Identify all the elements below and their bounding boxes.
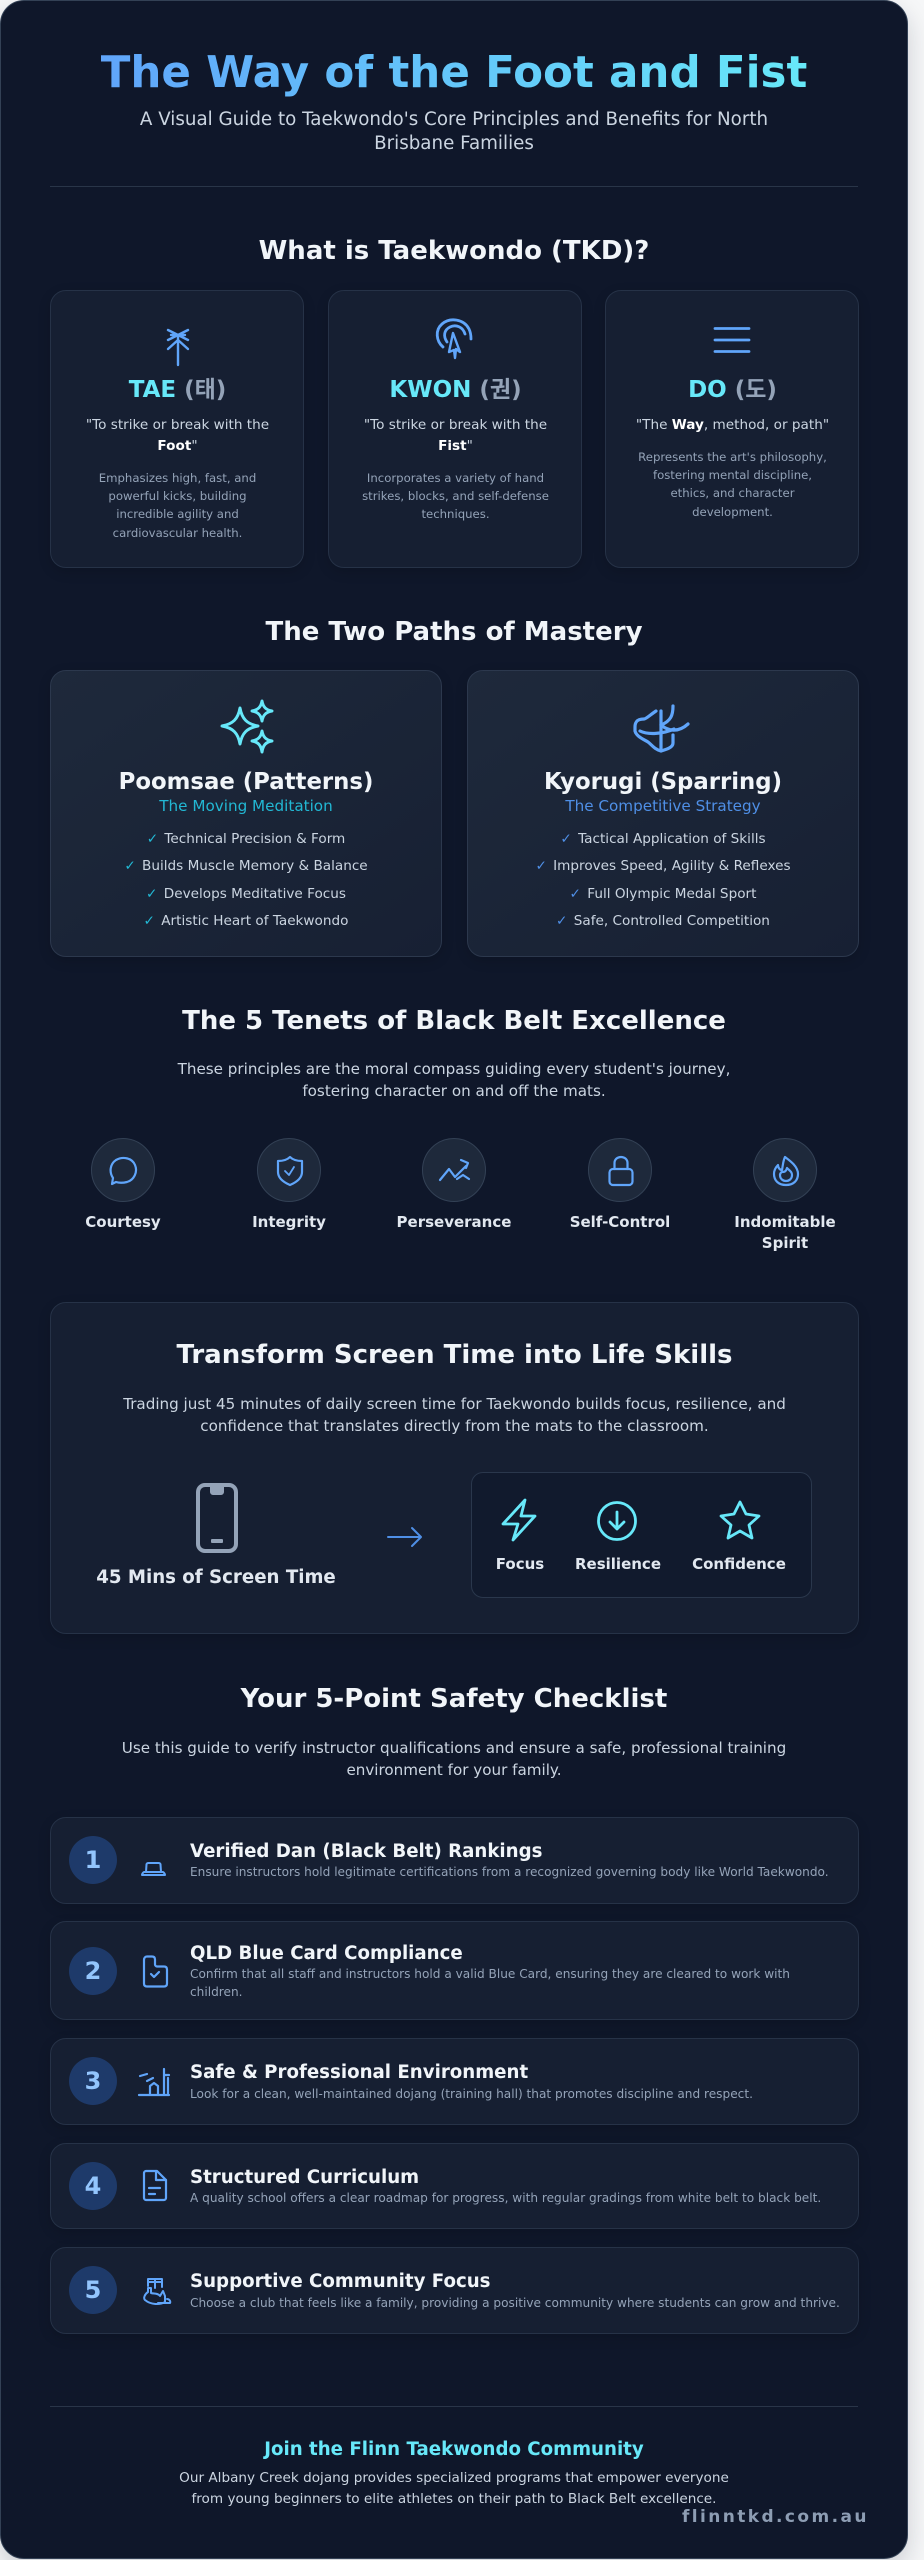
- subtitle: [140, 109, 768, 154]
- description: [190, 1967, 790, 1999]
- checklist: ✓ Tactical Application of Skills: [560, 831, 766, 847]
- quote: Fist": [438, 438, 473, 454]
- heading: tenets: The 5 Tenets of Black Belt Excellence: [182, 1006, 726, 1036]
- icon: sparkles: [220, 700, 274, 754]
- label: Resilience: [575, 1555, 661, 1573]
- card title: Kyorugi (Sparring): [544, 769, 782, 795]
- icon: foot: [166, 328, 190, 366]
- panel: Kyorugi: [467, 670, 859, 957]
- number badge: 3: [85, 2067, 101, 2095]
- card subtitle: The Moving Meditation: [159, 797, 333, 815]
- card title: KWON (권): [389, 377, 522, 403]
- tenet: perseverance: [397, 1138, 511, 1231]
- description: ethics, and character: [670, 486, 795, 500]
- number badge: 5: [85, 2276, 101, 2304]
- description: development.: [692, 505, 773, 519]
- title: Structured Curriculum: [190, 2167, 419, 2188]
- quote: [86, 417, 269, 454]
- watermark: flinntkd.com.au: [682, 2507, 869, 2527]
- footer text: Our Albany Creek dojang provides specialized programs that empower everyone: [179, 2470, 729, 2486]
- icon: flame: [753, 1138, 817, 1202]
- description: powerful kicks, building: [108, 489, 247, 503]
- title: Supportive Community Focus: [190, 2271, 490, 2292]
- heading: safety checklist: Your 5-Point Safety Checklist: [241, 1684, 667, 1714]
- number badge: 4: [85, 2172, 101, 2200]
- label: Self-Control: [570, 1213, 670, 1231]
- description: [99, 471, 256, 540]
- title: The Way of the Foot and Fist: [101, 48, 807, 98]
- title: QLD Blue Card Compliance: [190, 1943, 463, 1964]
- checklist intro: [122, 1739, 786, 1778]
- number badge: 2: [85, 1957, 101, 1985]
- icon: lock: [588, 1138, 652, 1202]
- card title: Poomsae (Patterns): [119, 769, 373, 795]
- checklist: [535, 831, 791, 929]
- icon: phone: [196, 1483, 238, 1553]
- checklist intro: Use this guide to verify instructor qualifications and ensure a safe, professional training: [122, 1739, 786, 1757]
- footer text: from young beginners to elite athletes on their path to Black Belt excellence.: [191, 2491, 716, 2507]
- tenets intro: [178, 1060, 730, 1100]
- description: confidence that translates directly from the mats to the classroom.: [200, 1416, 709, 1434]
- description: Emphasizes high, fast, and: [99, 471, 256, 485]
- subtitle: Brisbane Families: [374, 133, 534, 154]
- description: Represents the art's philosophy,: [638, 450, 827, 464]
- label: Integrity: [252, 1213, 326, 1231]
- icon: community: [142, 2276, 172, 2306]
- skill: focus: [496, 1498, 544, 1573]
- description: Look for a clean, well-maintained dojang (training hall) that promotes discipline and respect.: [190, 2087, 753, 2101]
- icon: lines: [714, 327, 750, 353]
- title: Safe & Professional Environment: [190, 2062, 528, 2083]
- item card: [50, 2038, 859, 2125]
- icon: file check: [142, 1955, 168, 1988]
- panel: screen time: [50, 1302, 859, 1634]
- tenet: indomitable spirit: [734, 1138, 836, 1252]
- checklist: ✓ Develops Meditative Focus: [146, 886, 346, 902]
- description: [362, 471, 549, 521]
- skill: confidence: [692, 1500, 786, 1573]
- checklist item 2: [50, 1921, 859, 2020]
- description: cardiovascular health.: [113, 526, 242, 540]
- description: fostering mental discipline,: [653, 468, 812, 482]
- panel: Poomsae: [50, 670, 442, 957]
- icon: document: [142, 2170, 168, 2201]
- subtitle: A Visual Guide to Taekwondo's Core Principles and Benefits for North: [140, 109, 768, 130]
- number badge: 1: [85, 1846, 101, 1874]
- panel: life skills: [471, 1472, 812, 1598]
- quote: "To strike or break with the: [364, 417, 547, 433]
- footer heading: Join the Flinn Taekwondo Community: [264, 2439, 644, 2460]
- icon: shield check: [257, 1138, 321, 1202]
- tenet: courtesy: [85, 1138, 161, 1231]
- label: Confidence: [692, 1555, 786, 1573]
- heading: Transform Screen Time into Life Skills: [176, 1340, 733, 1370]
- item card: [50, 2143, 859, 2229]
- description: [638, 450, 827, 519]
- footer text: [1, 2468, 907, 2510]
- icon: trend: [422, 1138, 486, 1202]
- tenet: integrity: [252, 1138, 326, 1231]
- description: Ensure instructors hold legitimate certifications from a recognized governing body like World Taekwondo.: [190, 1865, 829, 1879]
- icon: speech bubble: [91, 1138, 155, 1202]
- card subtitle: The Competitive Strategy: [565, 797, 761, 815]
- tenets intro: These principles are the moral compass guiding every student's journey,: [178, 1060, 730, 1078]
- icon: arrow circle: [597, 1501, 637, 1541]
- item card: [50, 2247, 859, 2334]
- title: Verified Dan (Black Belt) Rankings: [190, 1841, 542, 1862]
- heading: what is taekwondo: What is Taekwondo (TKD)?: [259, 236, 649, 266]
- quote: "The Way, method, or path": [636, 417, 829, 433]
- number badge: [69, 1947, 117, 1995]
- checklist: ✓ Full Olympic Medal Sport: [570, 886, 756, 902]
- tenets intro: fostering character on and off the mats.: [302, 1082, 606, 1100]
- panel: KWON: [328, 290, 582, 568]
- label: Focus: [496, 1555, 544, 1573]
- item card: [50, 1817, 859, 1904]
- checklist: ✓ Technical Precision & Form: [147, 831, 345, 847]
- heading: two paths: The Two Paths of Mastery: [265, 617, 643, 647]
- icon: star: [720, 1500, 760, 1540]
- description: children.: [190, 1985, 243, 1999]
- item card: [50, 1921, 859, 2020]
- icon: laptop: [141, 1862, 166, 1876]
- label: [734, 1213, 836, 1252]
- description: Trading just 45 minutes of daily screen time for Taekwondo builds focus, resilience, and: [123, 1395, 786, 1413]
- checklist: ✓ Improves Speed, Agility & Reflexes: [535, 858, 791, 874]
- description: incredible agility and: [116, 507, 239, 521]
- label: screen time: 45 Mins of Screen Time: [96, 1567, 336, 1588]
- quote: [364, 417, 547, 454]
- checklist: ✓ Builds Muscle Memory & Balance: [124, 858, 368, 874]
- quote: Foot": [157, 438, 198, 454]
- number badge: [69, 2162, 117, 2210]
- icon: bolt: [502, 1498, 536, 1542]
- checklist item 1: [50, 1817, 859, 1904]
- label: Spirit: [762, 1234, 808, 1252]
- checklist: ✓ Safe, Controlled Competition: [556, 913, 770, 929]
- tenet: self-control: [570, 1138, 670, 1231]
- card title: TAE (태): [129, 377, 226, 403]
- card title: DO (도): [688, 377, 777, 403]
- description: A quality school offers a clear roadmap for progress, with regular gradings from white belt to black belt.: [190, 2191, 821, 2205]
- description: techniques.: [421, 507, 490, 521]
- icon: swords: [633, 704, 690, 753]
- icon: fist: [436, 318, 472, 360]
- description: [123, 1395, 786, 1434]
- label: Perseverance: [397, 1213, 511, 1231]
- label: Courtesy: [85, 1213, 161, 1231]
- panel: DO: [605, 290, 859, 568]
- description: Choose a club that feels like a family, providing a positive community where students can grow and thrive.: [190, 2296, 840, 2310]
- checklist: ✓ Artistic Heart of Taekwondo: [144, 913, 348, 929]
- number badge: [69, 2266, 117, 2314]
- quote: "To strike or break with the: [86, 417, 269, 433]
- description: Incorporates a variety of hand: [367, 471, 544, 485]
- description: strikes, blocks, and self-defense: [362, 489, 549, 503]
- description: Confirm that all staff and instructors hold a valid Blue Card, ensuring they are cleared to work with: [190, 1967, 790, 1981]
- checklist: [124, 831, 368, 929]
- number badge: [69, 1836, 117, 1884]
- checklist intro: environment for your family.: [346, 1760, 562, 1778]
- skill: resilience: [575, 1501, 661, 1573]
- panel: TAE: [50, 290, 304, 568]
- label: Indomitable: [734, 1213, 836, 1231]
- arrow: [387, 1527, 422, 1547]
- number badge: [69, 2057, 117, 2105]
- icon: building: [138, 2067, 171, 2097]
